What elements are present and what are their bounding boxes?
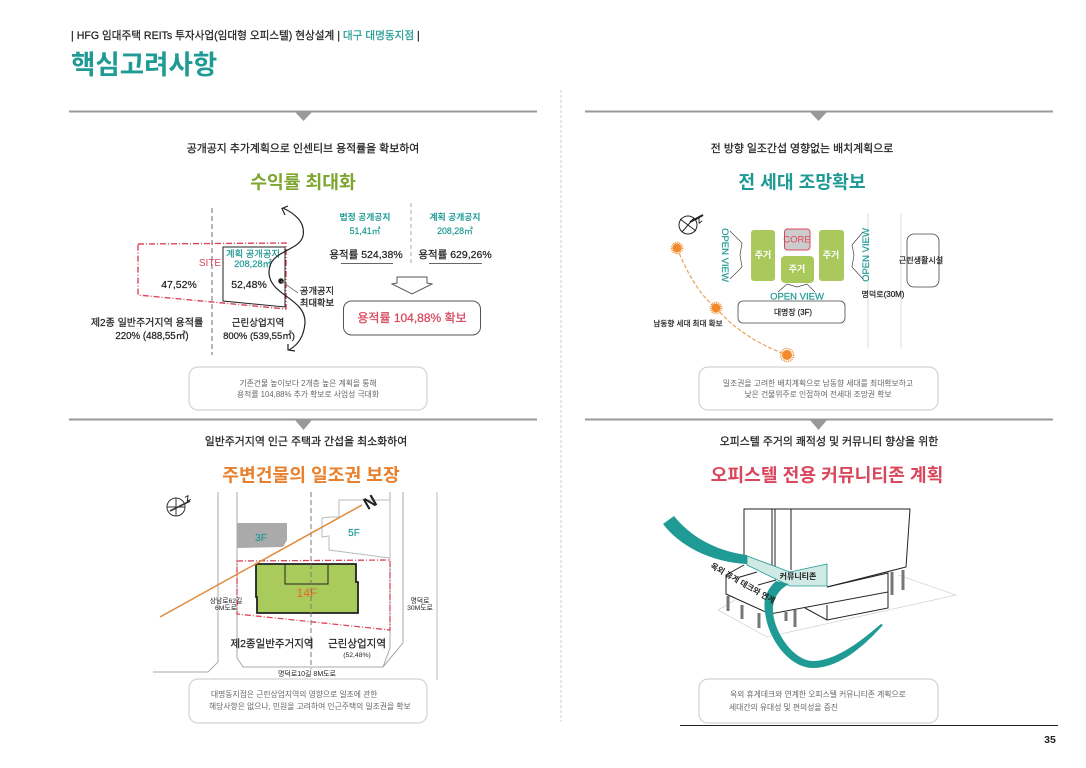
site diagram: 800% (539,55㎡) [223, 331, 295, 342]
site diagram: 계획 공개공지 [226, 248, 280, 259]
panel: community zone [585, 420, 1053, 723]
down arrow [392, 277, 432, 294]
layout diagram: 근린생활시설 [899, 255, 943, 265]
result callout: 용적률 104,88% 확보 [357, 311, 467, 325]
marker triangle [810, 420, 827, 430]
floor area comparison: 계획 공개공지 [429, 211, 481, 222]
layout diagram: CORE [783, 234, 811, 246]
site plan: 6M도로 [215, 604, 237, 612]
subheading: 오피스텔 주거의 쾌적성 및 커뮤니티 향상을 위한 [720, 435, 938, 448]
site plan: 명덕로10길 8M도로 [278, 669, 337, 678]
subheading: 일반주거지역 인근 주택과 간섭을 최소화하여 [205, 434, 407, 448]
layout diagram: OPEN VIEW [719, 228, 730, 282]
site diagram: SITE [199, 258, 221, 269]
note box: 세대간의 유대성 및 편의성을 증진 [729, 702, 838, 712]
panel: daylight rights [69, 420, 537, 723]
page number: 35 [1044, 734, 1056, 746]
layout diagram: 주거 [755, 249, 771, 260]
layout diagram: OPEN VIEW [770, 292, 824, 302]
note box [189, 367, 427, 410]
site plan: 5F [348, 528, 360, 539]
layout diagram [653, 213, 943, 362]
site plan: Z [184, 493, 192, 504]
heading: 전 세대 조망확보 [738, 172, 866, 192]
building diagram [663, 509, 956, 668]
layout diagram: 주거 [789, 263, 805, 274]
heading: 수익률 최대화 [250, 172, 356, 192]
note box: 기존건물 높이보다 2개층 높은 계획을 통해 [239, 378, 377, 388]
heading: 주변건물의 일조권 보장 [222, 466, 400, 486]
site plan: 상남로62길 [210, 596, 242, 605]
layout diagram: Z [695, 215, 704, 226]
note box: 옥외 휴게데크와 연계한 오피스텔 커뮤니티존 계획으로 [730, 689, 906, 699]
floor area comparison: 용적률 629,26% [418, 249, 492, 261]
building diagram: 옥외 휴게 데크와 연계 [709, 560, 777, 606]
site plan: N [360, 491, 380, 514]
site plan: 14F [297, 586, 317, 600]
note box: 대명동지점은 근린상업지역의 영향으로 일조에 관한 [211, 689, 377, 699]
site diagram: 220% (488,55㎡) [115, 330, 189, 342]
site plan: 근린상업지역 [328, 637, 386, 650]
site diagram: 제2종 일반주거지역 용적률 [91, 317, 203, 329]
layout diagram: 남동향 세대 최대 확보 [653, 318, 723, 328]
site plan [153, 491, 437, 680]
building diagram: 커뮤니티존 [780, 571, 817, 581]
note box [699, 367, 938, 410]
site diagram: 공개공지 [300, 286, 334, 296]
floor area comparison: 51,41㎡ [350, 226, 381, 236]
note box: 용적률 104,88% 추가 확보로 사업성 극대화 [237, 389, 379, 399]
layout diagram: 주거 [823, 249, 839, 260]
note box: 해당사항은 없으나, 민원을 고려하여 인근주택의 일조권을 확보 [209, 701, 411, 711]
marker triangle [295, 420, 312, 430]
site diagram: 208,28㎡ [234, 259, 273, 269]
site diagram: 근린상업지역 [232, 317, 284, 329]
site plan: 3F [255, 533, 267, 544]
layout diagram: 명덕로(30M) [862, 289, 905, 299]
floor area comparison [329, 203, 492, 266]
header breadcrumb: | HFG 임대주택 REITs 투자사업(임대형 오피스텔) 현상설계 | 대구 대명동지점 | [71, 29, 420, 42]
site diagram: 52,48% [231, 279, 267, 291]
heading: 오피스텔 전용 커뮤니티존 계획 [711, 466, 943, 486]
site diagram: 47,52% [161, 279, 197, 291]
note box: 낮은 건물위주로 인접하여 전세대 조망권 확보 [744, 389, 892, 399]
panel: profit maximization [69, 112, 537, 410]
note box [189, 679, 427, 723]
marker triangle [295, 112, 312, 121]
subheading: 공개공지 추가계획으로 인센티브 용적률을 확보하여 [187, 141, 419, 155]
floor area comparison: 용적률 524,38% [329, 249, 403, 261]
panel: views [585, 112, 1053, 410]
title: 핵심고려사항 [71, 50, 217, 80]
site plan: (52,48%) [343, 652, 371, 659]
layout diagram: OPEN VIEW [861, 228, 872, 282]
site plan: 30M도로 [407, 604, 433, 612]
site diagram: 최대확보 [300, 297, 335, 308]
layout diagram: 대명장 (3F) [774, 307, 812, 317]
site diagram [91, 206, 335, 355]
note box [699, 679, 938, 723]
note box: 일조권을 고려한 배치계획으로 남동향 세대를 최대확보하고 [723, 378, 913, 388]
floor area comparison: 법정 공개공지 [339, 211, 391, 222]
marker triangle [810, 112, 827, 121]
site plan: 제2종일반주거지역 [230, 637, 314, 650]
result callout [344, 301, 480, 335]
subheading: 전 방향 일조간섭 영향없는 배치계획으로 [711, 141, 893, 155]
floor area comparison: 208,28㎡ [437, 226, 473, 236]
site plan: 명덕로 [411, 596, 429, 605]
